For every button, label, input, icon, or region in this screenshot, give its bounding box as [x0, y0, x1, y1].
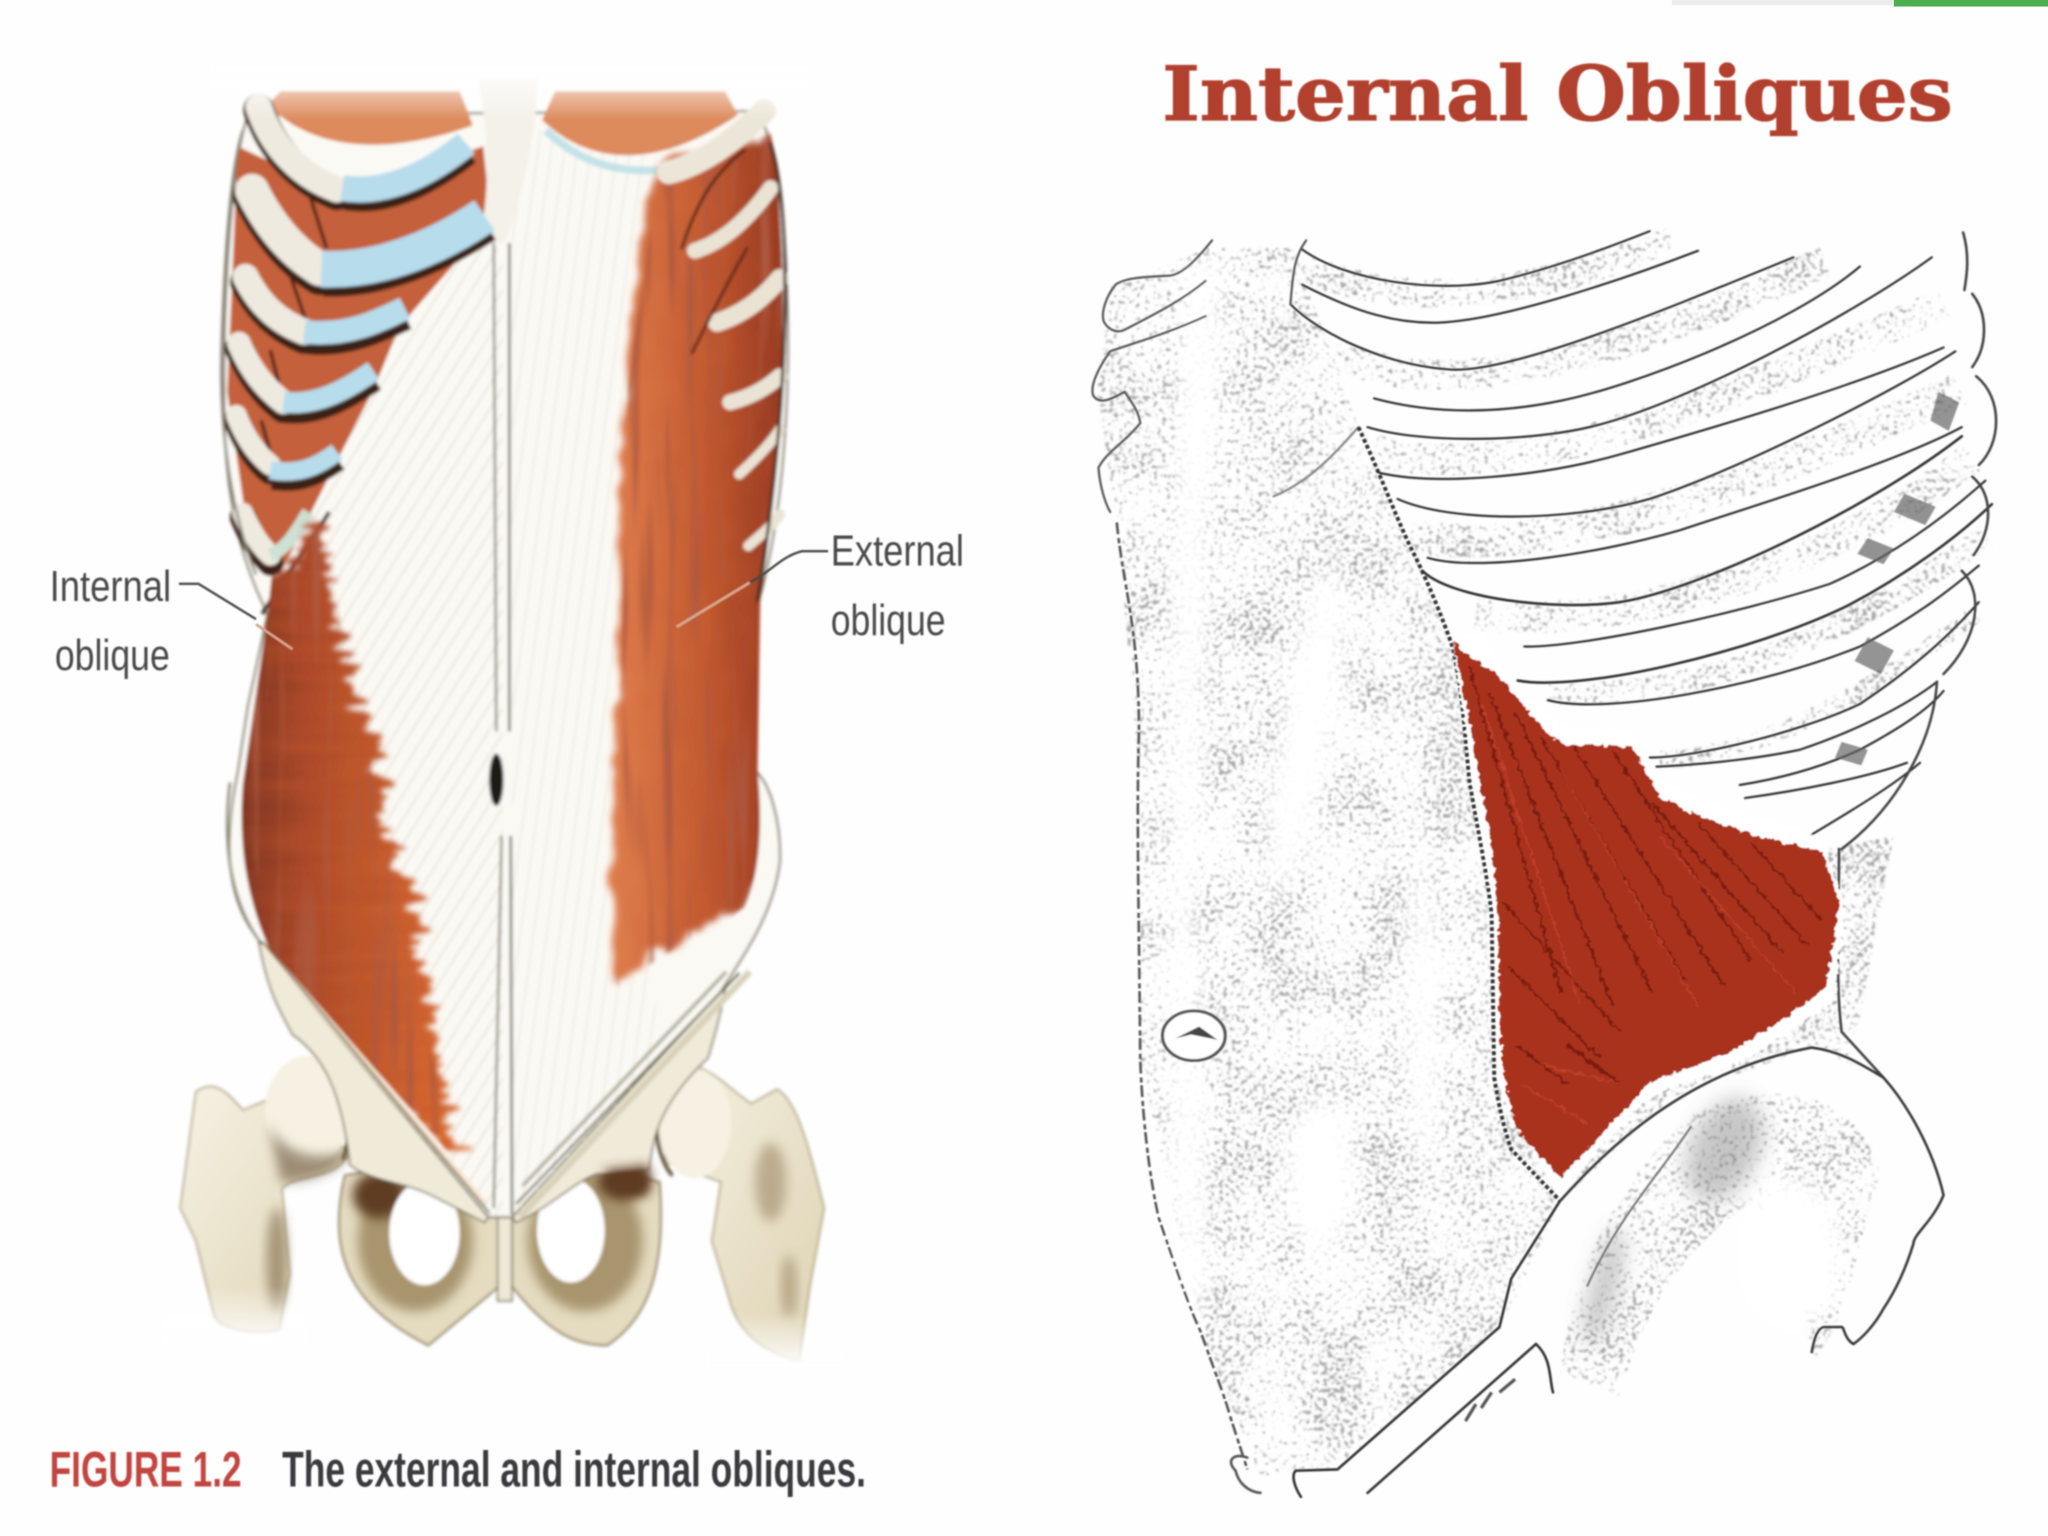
stippled flank — [1560, 836, 1894, 1202]
navel — [1162, 1011, 1225, 1061]
right external oblique muscle — [612, 131, 797, 986]
leader line: external oblique — [677, 551, 828, 627]
pectoral muscle at top — [268, 91, 473, 145]
rib tail into the muscle — [263, 512, 329, 614]
right rib segments — [227, 111, 785, 938]
left internal oblique muscle — [222, 520, 457, 1149]
leader line: internal oblique — [179, 584, 293, 649]
iliac crest outline — [1560, 1048, 1944, 1353]
sternum — [478, 78, 538, 243]
rib contour lines — [1290, 231, 1992, 839]
top and femur fades — [163, 63, 842, 1368]
right muscle fibre streaks — [616, 131, 784, 986]
internal oblique muscle — [1452, 632, 1844, 1186]
aponeurosis fibres — [286, 248, 647, 1213]
anatomy illustration — [163, 63, 842, 1368]
left muscle fibre streaks — [251, 522, 439, 1134]
inguinal ligament and pubis — [1231, 1202, 1560, 1497]
label: external oblique — [831, 528, 964, 645]
inner iliac line — [1587, 1126, 1691, 1287]
panel: front view of external and internal obliques — [50, 63, 964, 1497]
figure caption: FIGURE 1.2 — [50, 1441, 242, 1497]
stippled abdominal wall — [1097, 248, 1560, 1476]
figure caption: The external and internal obliques. — [282, 1441, 866, 1497]
sternum and costal outline — [1092, 240, 1358, 512]
label: internal oblique: Internal — [50, 563, 171, 611]
label: internal oblique: oblique — [55, 632, 170, 680]
label: external oblique: External — [831, 528, 964, 576]
intercostal gaps — [1835, 392, 1959, 765]
inguinal ligament folds — [263, 942, 750, 1217]
left side contour — [1117, 522, 1247, 1469]
ribs, left — [236, 107, 485, 563]
small pencil mark near ligament — [1465, 1379, 1515, 1421]
title: Internal Obliques — [1162, 50, 1953, 138]
outer rib cage edge, left — [221, 131, 256, 575]
stippled iliac crest — [1561, 1094, 1881, 1398]
muscle fibres — [1469, 666, 1822, 1084]
pelvis and femurs — [180, 940, 824, 1361]
top edge strip — [1672, 0, 2048, 7]
linea alba — [494, 243, 512, 1215]
pale cartilage rim, right chest — [546, 131, 669, 171]
figure caption — [50, 1441, 866, 1497]
torso illustration — [1092, 231, 1996, 1497]
intercostal muscles, left — [227, 146, 491, 575]
white tendon edge — [1452, 632, 1844, 1186]
iliac bone bands — [259, 940, 494, 1223]
shaded iliac fossa — [1576, 1085, 1778, 1348]
outer rib cage outline — [1838, 232, 1996, 1078]
rectus sheath seam — [1358, 427, 1560, 1200]
label: external oblique: oblique — [831, 597, 946, 645]
stippled rib bands — [1302, 242, 1985, 760]
muscle body — [1452, 640, 1839, 1178]
abdominal wall base — [224, 111, 788, 1217]
label: internal oblique — [50, 563, 171, 680]
panel: side view of internal oblique — [1092, 50, 1996, 1497]
navel — [489, 754, 504, 806]
white highlights on wall — [1169, 261, 1842, 1332]
